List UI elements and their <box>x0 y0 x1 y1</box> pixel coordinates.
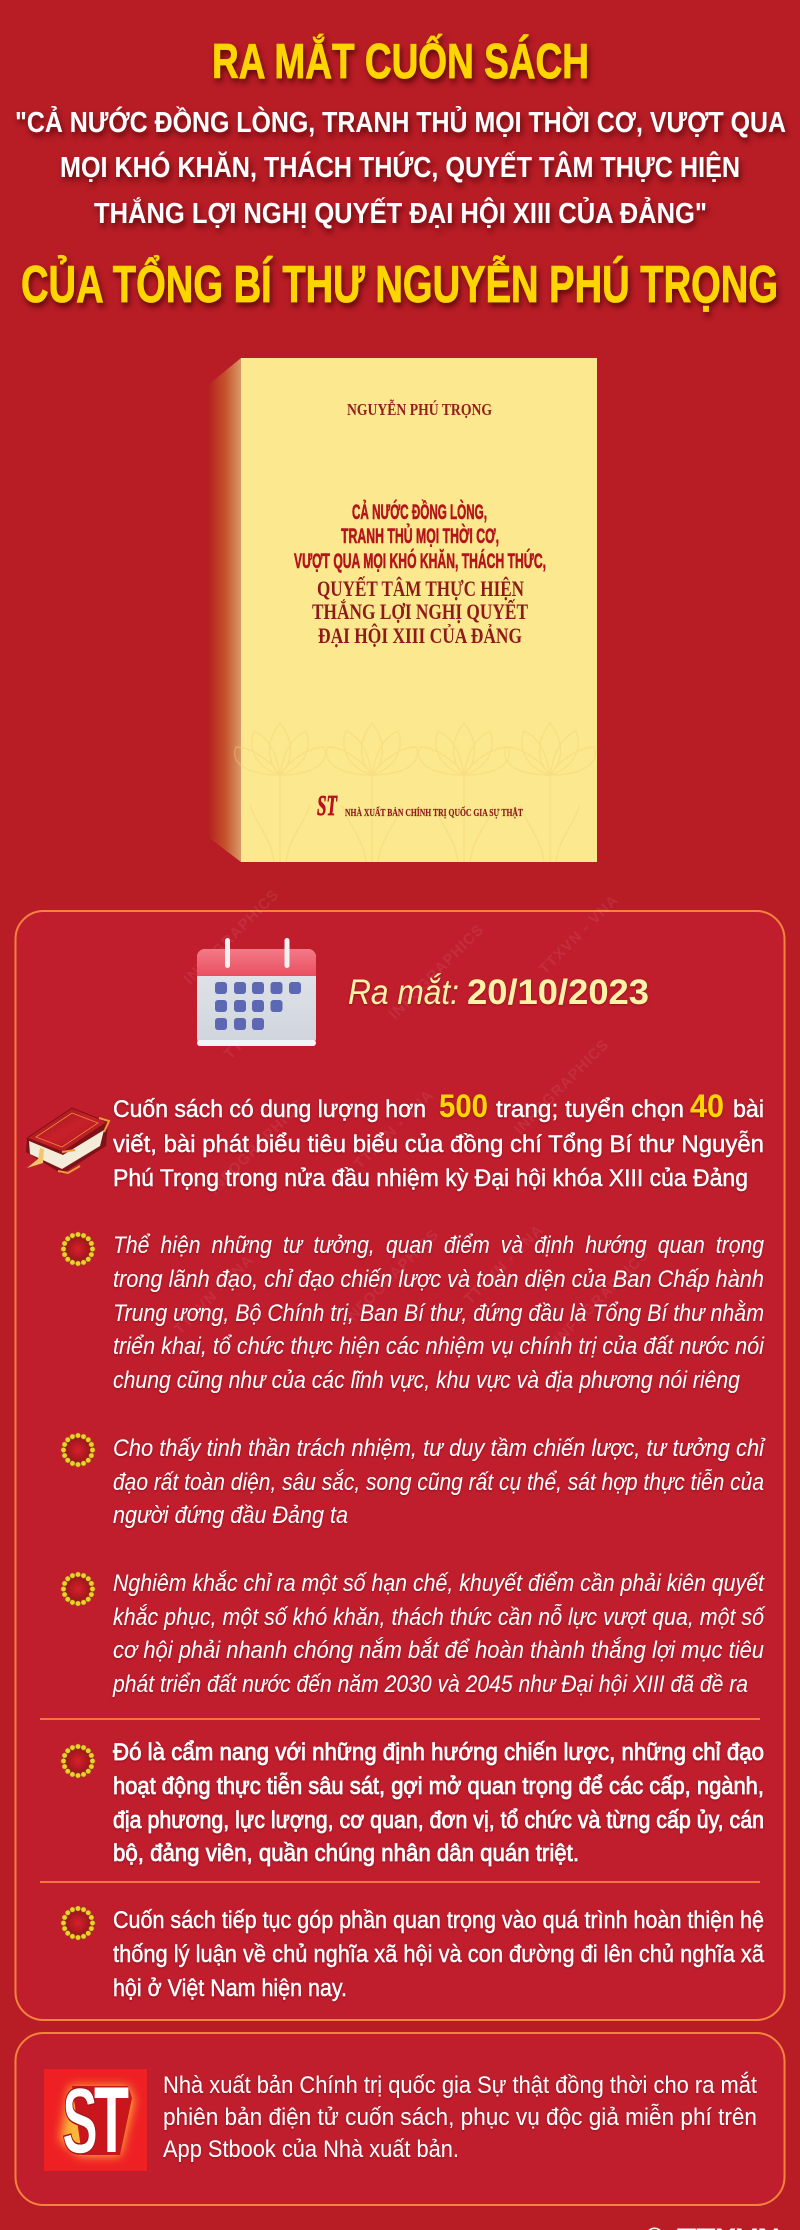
paragraph: page count: bài <box>733 1096 764 1123</box>
icon: ST logo: S <box>62 2068 98 2173</box>
watermarks: TTXVN - VNA <box>171 1251 257 1338</box>
watermarks: TTXVN - VNA <box>221 976 307 1063</box>
watermarks: TTXVN - VNA <box>461 1221 547 1308</box>
book cover title: CẢ NƯỚC ĐỒNG LÒNG, <box>352 500 487 524</box>
paragraph: page count: Cuốn sách có dung lượng hơn <box>113 1096 426 1123</box>
paragraph: sense of responsibility: người đứng đầu Đảng ta <box>113 1502 348 1529</box>
paragraph: theory contribution <box>113 1907 764 2002</box>
book cover title: ĐẠI HỘI XIII CỦA ĐẢNG <box>318 623 522 648</box>
paragraph: thoughts and viewpoints <box>113 1232 764 1394</box>
title <box>15 34 786 314</box>
icon: calendar <box>197 938 316 1046</box>
release date: Ra mắt: <box>348 973 459 1012</box>
watermarks: TTXVN - VNA <box>536 891 622 978</box>
book title quote <box>15 105 786 230</box>
paragraph: e-book: App Stbook của Nhà xuất bản. <box>163 2136 459 2163</box>
panel frame <box>16 911 784 2020</box>
paragraph: limitations and opportunities <box>112 1570 766 1698</box>
book cover title: QUYẾT TÂM THỰC HIỆN <box>317 576 524 601</box>
paragraph: page count: 40 <box>690 1088 724 1124</box>
book cover title <box>294 500 546 648</box>
paragraph: e-book: phiên bản điện tử cuốn sách, phục vụ độc giả miễn phí trên <box>163 2104 757 2131</box>
paragraph: page count <box>113 1088 764 1192</box>
panel: publisher note <box>16 2033 784 2205</box>
book front cover <box>241 358 597 862</box>
icon: medal bullet 5 <box>61 1906 95 1940</box>
copyright logo <box>645 2222 780 2230</box>
panel: book details <box>16 886 784 2020</box>
release date: 20/10/2023 <box>467 973 649 1012</box>
book cover image <box>208 358 597 862</box>
release date <box>348 973 649 1012</box>
book cover title: THẮNG LỢI NGHỊ QUYẾT <box>312 599 528 624</box>
watermarks: INFOGRAPHICS <box>206 1096 308 1198</box>
book cover title: VƯỢT QUA MỌI KHÓ KHĂN, THÁCH THỨC, <box>294 549 546 573</box>
lotus pattern <box>235 723 595 862</box>
watermarks: INFOGRAPHICS <box>386 921 488 1023</box>
publisher name: NHÀ XUẤT BẢN CHÍNH TRỊ QUỐC GIA SỰ THẬT <box>345 806 523 819</box>
paragraph: handbook: bộ, đảng viên, quần chúng nhân dân quán triệt. <box>113 1840 579 1867</box>
paragraph: sense of responsibility <box>113 1435 766 1529</box>
icon: ST logo <box>44 2067 147 2173</box>
watermarks: INFOGRAPHICS <box>341 1226 443 1328</box>
paragraph: page count: trang; tuyển chọn <box>496 1096 684 1123</box>
paragraph: page count: viết, bài phát biểu tiêu biểu của đồng chí Tổng Bí thư Nguyễn <box>113 1131 764 1158</box>
paragraph: page count: Phú Trọng trong nửa đầu nhiệm kỳ Đại hội khóa XIII của Đảng <box>113 1165 748 1192</box>
paragraph: theory contribution: hội ở Việt Nam hiện nay. <box>113 1975 347 2002</box>
watermarks: INFOGRAPHICS <box>511 1036 613 1138</box>
paragraph: e-book <box>163 2072 757 2163</box>
watermarks <box>171 886 653 1348</box>
book cover title: TRANH THỦ MỌI THỜI CƠ, <box>341 524 499 548</box>
icon: medal bullet 2 <box>61 1433 95 1467</box>
icon: ST logo: T <box>94 2067 129 2172</box>
title line: launch heading: RA MẮT CUỐN SÁCH <box>212 34 589 89</box>
paragraph: page count: 500 <box>439 1088 488 1124</box>
book author: NGUYỄN PHÚ TRỌNG <box>347 400 492 419</box>
icon: medal bullet 4 <box>61 1744 95 1778</box>
watermarks: INFOGRAPHICS <box>551 1246 653 1348</box>
book spine <box>208 358 241 862</box>
icon: medal bullet 3 <box>61 1572 95 1606</box>
watermarks: INFOGRAPHICS <box>181 886 283 988</box>
icon: medal bullet 1 <box>61 1232 95 1266</box>
book title quote: THẮNG LỢI NGHỊ QUYẾT ĐẠI HỘI XIII CỦA ĐẢNG" <box>94 196 707 230</box>
icon: book <box>26 1108 109 1174</box>
panel frame <box>16 2033 784 2205</box>
publisher mark: ST <box>317 791 338 822</box>
watermarks: TTXVN - VNA <box>351 1086 437 1173</box>
paragraph: handbook <box>113 1739 764 1867</box>
